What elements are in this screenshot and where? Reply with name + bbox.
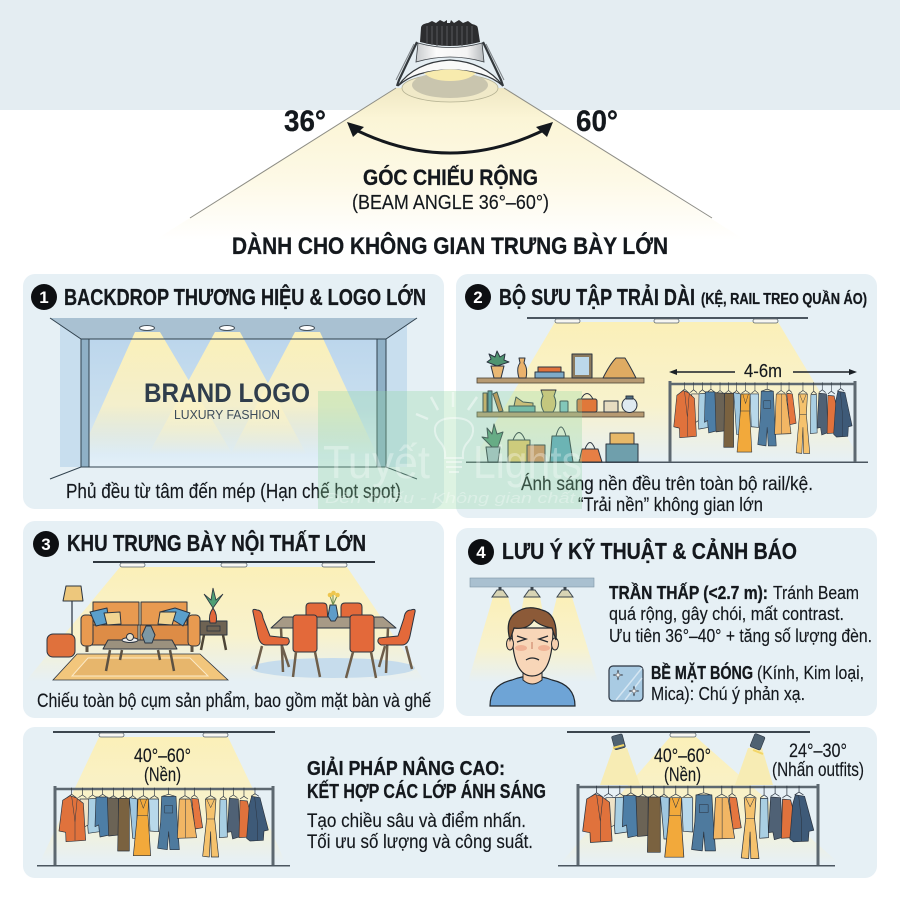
badge 2: 2 xyxy=(473,288,483,307)
accent role: (Nhấn outfits) xyxy=(772,760,864,781)
badge 2 xyxy=(465,284,491,310)
note: glossy surfaces: BỀ MẶT BÓNG xyxy=(651,662,753,683)
right angle label: 40°–60° xyxy=(654,746,711,767)
heading 1: BACKDROP THƯƠNG HIỆU & LOGO LỚN xyxy=(64,283,426,310)
dimension arrow 4-6 m xyxy=(669,361,857,381)
caption 1: Phủ đều từ tâm đến mép (Hạn chế hot spot) xyxy=(66,481,401,503)
note: glossy surfaces: Mica): Chú ý phản xạ. xyxy=(651,684,805,704)
right beam role: (Nền) xyxy=(664,765,701,786)
heading 3: KHU TRƯNG BÀY NỘI THẤT LỚN xyxy=(67,529,366,556)
note: low ceiling: Tránh Beam xyxy=(773,583,859,603)
label: 36 degrees: 36° xyxy=(284,105,326,138)
badge 4 xyxy=(468,539,494,565)
shelves with products xyxy=(466,351,868,463)
badge 1 xyxy=(31,284,57,310)
heading 4: LƯU Ý KỸ THUẬT & CẢNH BÁO xyxy=(502,536,797,564)
icon: downlight lamp xyxy=(396,20,504,102)
ceiling lamps with beams xyxy=(468,578,598,682)
note: low ceiling: TRẦN THẤP (<2.7 m): xyxy=(609,582,768,603)
solution text: Tối ưu số lượng và công suất. xyxy=(307,832,533,853)
panel 2: long collection xyxy=(456,274,877,518)
man squinting from glare xyxy=(490,608,575,706)
solution heading xyxy=(307,756,546,803)
accent angle label: 24°–30° xyxy=(789,741,847,762)
watermark: Lights xyxy=(473,436,582,488)
title: DÀNH CHO KHÔNG GIAN TRƯNG BÀY LỚN xyxy=(232,232,668,260)
note: low ceiling xyxy=(609,582,872,646)
arrow: beam angle arc xyxy=(347,122,553,153)
note: glossy surfaces: (Kính, Kim loại, xyxy=(757,663,864,683)
light beam xyxy=(25,567,425,682)
page background band xyxy=(0,0,900,110)
dimension arrow 4-6 m: 4-6m xyxy=(744,361,782,381)
room illustration xyxy=(50,318,417,479)
caption 2 line 1: Ánh sáng nền đều trên toàn bộ rail/kệ. xyxy=(521,474,813,495)
solution heading: KẾT HỢP CÁC LỚP ÁNH SÁNG xyxy=(307,779,546,803)
light beam xyxy=(472,322,862,462)
watermark: Tuyết xyxy=(323,436,430,488)
caption 3: Chiếu toàn bộ cụm sản phẩm, bao gồm mặt bàn và ghế xyxy=(37,691,431,712)
brand logo: BRAND LOGO xyxy=(144,378,310,408)
heading 2: BỘ SƯU TẬP TRẢI DÀI xyxy=(499,282,695,310)
header: beam of light xyxy=(155,88,745,240)
note: glossy surfaces xyxy=(651,662,864,704)
badge 3: 3 xyxy=(41,535,51,554)
panel 5: advanced solution xyxy=(23,727,877,878)
watermark xyxy=(318,391,582,509)
solution text: Tạo chiều sâu và điểm nhấn. xyxy=(307,811,526,832)
panel 1: backdrop xyxy=(23,274,444,509)
dining set xyxy=(251,591,415,678)
badge 4: 4 xyxy=(476,543,486,562)
left scene: background beam and rack xyxy=(37,731,290,866)
caption 2 line 2: “Trải nền” không gian lớn xyxy=(578,495,763,516)
living room set xyxy=(47,586,228,680)
panel 4: technical notes xyxy=(456,528,877,716)
left angle label: 40°–60° xyxy=(134,746,191,767)
subheading: beam angle range: (BEAM ANGLE 36°–60°) xyxy=(352,192,549,214)
note: low ceiling: quá rộng, gây chói, mất contrast. xyxy=(609,604,844,624)
badge 1: 1 xyxy=(39,288,49,307)
badge 3 xyxy=(33,531,59,557)
label: 60 degrees: 60° xyxy=(576,105,618,138)
right scene: layered beams and rack xyxy=(558,731,840,866)
brand tagline: LUXURY FASHION xyxy=(174,407,280,422)
panel 3: furniture xyxy=(23,521,444,718)
icon: glossy surface xyxy=(609,666,643,701)
solution heading: GIẢI PHÁP NÂNG CAO: xyxy=(307,756,505,780)
heading: wide beam angle: GÓC CHIẾU RỘNG xyxy=(363,165,538,190)
ceiling rail and lamps xyxy=(93,561,375,567)
left beam role: (Nền) xyxy=(144,765,181,786)
watermark: Đèn chiếu - Không gian chất xyxy=(325,490,576,507)
ceiling rail and lamps xyxy=(527,317,808,323)
rail with clothes xyxy=(670,381,855,462)
solution text xyxy=(307,811,533,853)
